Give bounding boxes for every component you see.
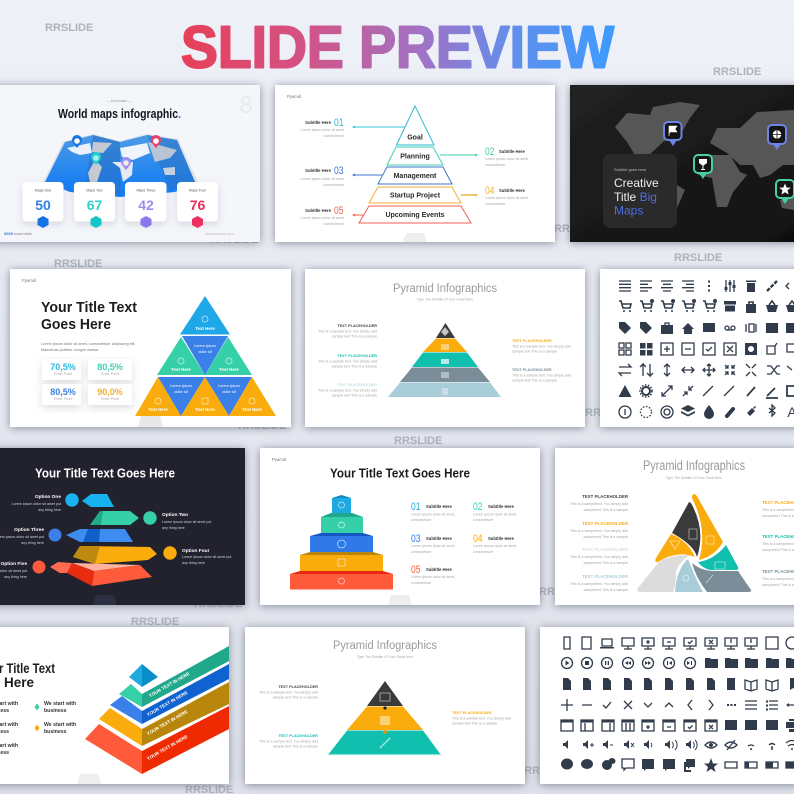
panel: pyramid infographics slide one bbox=[305, 269, 585, 427]
left labels: TEXT PLACEHOLDER bbox=[337, 383, 377, 387]
left labels: samplerext This is a sample bbox=[584, 508, 628, 512]
pyramid bbox=[388, 323, 501, 397]
heading: Your Title Text Goes Here bbox=[330, 466, 470, 480]
card: maps three: Maps Three bbox=[136, 188, 156, 192]
triangle pyramid: Text Here bbox=[195, 326, 215, 331]
left labels: This is a sampletext. You simply add bbox=[570, 502, 628, 506]
info panel bbox=[603, 154, 677, 228]
pyramid bbox=[328, 681, 441, 755]
stat cards: 70,5% bbox=[50, 362, 76, 372]
world map silhouette bbox=[615, 102, 794, 210]
right labels: This is a sample text. You simply add bbox=[512, 374, 571, 378]
icons row: devices bbox=[564, 637, 794, 649]
bullets: business bbox=[44, 729, 67, 735]
right labels bbox=[762, 500, 794, 587]
slide number: 8 bbox=[239, 92, 253, 119]
numbered items: 03 bbox=[411, 533, 420, 545]
panel: pyramid infographics slide two: Pyramid Infographics bbox=[333, 640, 437, 652]
icons row: text alignment and tools bbox=[619, 280, 789, 292]
triangle pyramid: Text Here bbox=[148, 407, 168, 412]
stat cards: Enter Point bbox=[54, 372, 72, 376]
option labels: Option Two bbox=[162, 512, 188, 518]
numbered items: Lorem ipsum dolor sit amet, bbox=[473, 544, 517, 548]
watermarks: RRSLIDE bbox=[210, 234, 258, 246]
left labels: sample text This is a sample bbox=[273, 696, 318, 700]
left callouts bbox=[301, 117, 405, 226]
bullets: We start with bbox=[44, 722, 76, 728]
left callouts: consectetuer bbox=[323, 134, 345, 138]
watermarks: RRSLIDE bbox=[713, 66, 761, 78]
spiral pyramid bbox=[637, 494, 751, 592]
panel: stacked pyramid slide: Pyamid bbox=[272, 457, 287, 462]
option labels: Option Three bbox=[14, 527, 44, 533]
folded world map bbox=[42, 134, 199, 197]
icon grid bbox=[561, 637, 794, 772]
tier labels: Management bbox=[394, 173, 437, 180]
left callouts: 05 bbox=[334, 205, 344, 217]
stat cards: 90,0% bbox=[97, 387, 123, 397]
panel: outlined pyramid slide: Pyamid bbox=[287, 94, 302, 99]
triangle pyramid: dolor sit bbox=[222, 390, 237, 394]
watermarks: RRSLIDE bbox=[45, 22, 93, 34]
numbered items: 04 bbox=[473, 533, 482, 545]
triangle pyramid bbox=[135, 296, 276, 416]
stat cards: 80,5% bbox=[50, 387, 76, 397]
stat cards bbox=[42, 359, 132, 405]
right callouts: Lorem ipsum dolor sit amet bbox=[485, 196, 528, 200]
option labels: any thing here bbox=[162, 526, 185, 530]
watermarks: RRSLIDE bbox=[54, 258, 102, 270]
left labels: sample text This is a sample bbox=[332, 364, 377, 368]
option labels: Lorem ipsum dolor sit amet put bbox=[182, 555, 231, 559]
icons row: warning and resize bbox=[618, 385, 794, 398]
right callouts: 04 bbox=[485, 185, 494, 197]
isometric pyramid: YOUR TEXT IN HERE bbox=[146, 709, 189, 736]
map pins bbox=[72, 135, 82, 148]
left labels: This is a sample text. You simply add bbox=[318, 330, 377, 334]
card: maps one: 50 bbox=[35, 197, 51, 213]
card: maps four bbox=[177, 182, 218, 228]
option labels: any thing here bbox=[4, 575, 27, 579]
panel: icon set two bbox=[540, 627, 794, 784]
bullets: art with bbox=[0, 722, 18, 728]
left labels bbox=[259, 685, 318, 748]
triangle pyramid: Lorem ipsum bbox=[170, 384, 192, 388]
watermarks: RRSLIDE bbox=[238, 420, 286, 432]
panel: spiral pyramid slide bbox=[555, 448, 794, 605]
triangle pyramid: dolor sit bbox=[174, 390, 189, 394]
card: maps one: Maps One bbox=[35, 188, 51, 192]
left labels: samplerext This is a sample bbox=[584, 588, 628, 592]
left labels: This is a sample text. You simply add bbox=[318, 388, 377, 392]
numbered items: Lorem ipsum dolor sit amet, bbox=[473, 512, 517, 516]
tier labels: Upcoming Events bbox=[385, 212, 445, 219]
panel: isometric ribbon pyramid slide bbox=[0, 627, 229, 784]
numbered items: Subtitle Here bbox=[488, 536, 514, 541]
left callouts: consectetuer bbox=[323, 183, 345, 187]
left callouts: Subtitle Here bbox=[305, 168, 332, 173]
numbered items: Subtitle Here bbox=[426, 567, 452, 572]
footer: 2023 essentials bbox=[4, 231, 32, 236]
icons row: misc symbols bbox=[619, 404, 794, 420]
panel: icon set one bbox=[600, 269, 794, 427]
numbered items: Lorem ipsum dolor sit amet, bbox=[411, 575, 455, 579]
panel: spiral pyramid slide: Type The Subtitle Of Your Great Here bbox=[666, 476, 722, 480]
slide heading: World maps infographic. bbox=[58, 106, 181, 121]
left labels: This is a sample text. You simply add bbox=[259, 740, 318, 744]
right label: This is a sample text. You simply add bbox=[452, 716, 511, 720]
body text bbox=[41, 342, 136, 352]
bullets bbox=[0, 701, 76, 756]
watermarks: RRSLIDE bbox=[674, 252, 722, 264]
card: maps two: 67 bbox=[87, 197, 102, 213]
icons row: carts and shop bbox=[619, 299, 794, 313]
left callouts: Lorem ipsum dolor sit amet bbox=[301, 177, 344, 181]
right callouts bbox=[440, 146, 528, 206]
option circles bbox=[32, 493, 177, 574]
bullets: art with bbox=[0, 701, 18, 707]
numbered items: 02 bbox=[473, 501, 482, 513]
right labels bbox=[512, 339, 571, 382]
right callouts: 02 bbox=[485, 146, 494, 158]
right labels: This is a sample text. You simply add bbox=[512, 344, 571, 348]
watermarks: RRSLIDE bbox=[554, 223, 602, 235]
icons row: windows and mail bbox=[561, 719, 794, 732]
left labels: TEXT PLACEHOLDER bbox=[337, 324, 377, 328]
numbered items: consectetuer bbox=[411, 518, 432, 522]
left labels: This is a sampletext. You simply add bbox=[570, 529, 628, 533]
card: maps four: Maps Four bbox=[189, 188, 207, 192]
option labels: Option Five bbox=[1, 561, 27, 567]
left labels bbox=[318, 324, 377, 398]
left callouts: 03 bbox=[334, 165, 344, 177]
triangle pyramid: dolor sit bbox=[198, 350, 213, 354]
card: maps two: Maps Two bbox=[86, 188, 103, 192]
left labels: samplerext This is a sample bbox=[584, 535, 628, 539]
left labels: TEXT PLACEHOLDER bbox=[582, 521, 629, 526]
left callouts: Lorem ipsum dolor sit amet bbox=[301, 128, 344, 132]
icons row: chat, star, batteries bbox=[561, 758, 794, 772]
right labels: TEXT PLACEHOLDER bbox=[512, 368, 552, 372]
watermarks: RRSLIDE bbox=[539, 586, 587, 598]
watermarks: RRSLIDE bbox=[585, 407, 633, 419]
option labels: any thing here bbox=[38, 508, 61, 512]
icon grid bbox=[618, 280, 794, 420]
stat cards: 80,5% bbox=[97, 362, 123, 372]
left callouts: Subtitle Here bbox=[305, 120, 332, 125]
card: maps three: 42 bbox=[138, 197, 154, 213]
left labels: TEXT PLACEHOLDER bbox=[337, 354, 377, 358]
bullets: ess bbox=[0, 729, 9, 735]
panel: dark layered pyramid slide bbox=[0, 448, 245, 605]
page tab bbox=[388, 595, 412, 605]
stacked pyramid tiers bbox=[290, 495, 393, 590]
bullets: business bbox=[44, 708, 67, 714]
right callouts: consectetuer bbox=[485, 163, 506, 167]
numbered items: consectetuer bbox=[473, 518, 494, 522]
isometric pyramid: YOUR TEXT IN HERE bbox=[148, 671, 191, 698]
right label: sample text This is a sample bbox=[452, 722, 497, 726]
panel: triangle pyramid slide bbox=[10, 269, 291, 427]
right labels: TEXT PLACEHOLDER bbox=[512, 339, 552, 343]
triangle pyramid: Text Here bbox=[195, 407, 215, 412]
bullets: art with bbox=[0, 743, 18, 749]
left labels: TEXT PLACEHOLDER bbox=[278, 734, 318, 738]
panel: world maps infographic slide bbox=[0, 85, 260, 242]
isometric pyramid bbox=[85, 646, 229, 774]
watermarks: RRSLIDE bbox=[194, 598, 242, 610]
tier labels: Planning bbox=[400, 154, 430, 160]
isometric pyramid: YOUR TEXT IN HERE bbox=[146, 734, 189, 761]
option labels: Lorem ipsum dolor sit amet put bbox=[12, 502, 61, 506]
panel: stacked pyramid slide bbox=[260, 448, 540, 605]
left labels: sample text This is a sample bbox=[332, 394, 377, 398]
panel: pyramid infographics slide two: Type The Subtitle Of Your Great Here bbox=[357, 655, 413, 659]
stat cards: Enter Point bbox=[101, 372, 119, 376]
page tab bbox=[138, 416, 163, 427]
heading bbox=[0, 661, 55, 690]
panel: creative title big maps slide bbox=[570, 85, 794, 242]
left callouts: consectetuer bbox=[323, 222, 345, 226]
heading: r Title Text bbox=[0, 661, 55, 676]
pin: globe bbox=[768, 125, 786, 150]
heading: Your Title Text Goes Here bbox=[35, 466, 175, 480]
pyramid layers bbox=[50, 494, 157, 586]
option labels: any thing here bbox=[21, 541, 44, 545]
left labels: This is a sample text. You simply add bbox=[318, 360, 377, 364]
icons row: arrows bbox=[619, 364, 792, 376]
icons row: documents bbox=[563, 678, 794, 691]
right label bbox=[452, 711, 511, 726]
pin: trophy bbox=[694, 155, 712, 179]
numbered items: Subtitle Here bbox=[426, 504, 452, 509]
right callouts: consectetuer bbox=[485, 202, 506, 206]
body text: Lorem ipsum dolor sit amet, consectetuer adipiscing elit. bbox=[41, 342, 136, 346]
left labels: This is a sampletext. You simply add bbox=[570, 582, 628, 586]
panel: spiral pyramid slide: Pyramid Infographics bbox=[643, 458, 745, 473]
left labels bbox=[570, 494, 629, 592]
right label: TEXT PLACEHOLDER bbox=[452, 711, 492, 715]
body text: Maecenas porttitor congue massa bbox=[41, 348, 99, 352]
tier labels bbox=[385, 134, 445, 219]
card: maps three bbox=[125, 182, 166, 228]
info panel: Title Big bbox=[614, 190, 657, 204]
triangle pyramid: Lorem ipsum bbox=[194, 344, 216, 348]
left labels: TEXT PLACEHOLDER bbox=[582, 547, 629, 552]
numbered items: Subtitle Here bbox=[426, 536, 452, 541]
slide kicker: — e2zentials — bbox=[106, 99, 132, 103]
triangle pyramid: Text Here bbox=[219, 367, 239, 372]
tier labels: Startup Project bbox=[390, 192, 441, 200]
watermarks: RRSLIDE bbox=[131, 616, 179, 628]
stat cards: Enter Point bbox=[54, 397, 72, 401]
numbered items: Lorem ipsum dolor sit amet, bbox=[411, 544, 455, 548]
option labels: Lorem ipsum dolor sit amet put bbox=[162, 520, 211, 524]
info panel: Subtitle goes here bbox=[614, 167, 647, 172]
numbered items: consectetuer bbox=[411, 550, 432, 554]
bullets: We start with bbox=[44, 701, 76, 707]
right labels: sample text This is a sample bbox=[512, 378, 557, 382]
right callouts: Lorem ipsum dolor sit amet bbox=[485, 157, 528, 161]
left labels: This is a sample text. You simply add bbox=[259, 690, 318, 694]
right callouts: Subtitle Here bbox=[499, 188, 525, 193]
panel: pyramid infographics slide one: Pyramid Infographics bbox=[393, 283, 497, 295]
left callouts: Lorem ipsum dolor sit amet bbox=[301, 216, 344, 220]
right callouts: Subtitle Here bbox=[499, 149, 525, 154]
numbered items: 05 bbox=[411, 564, 420, 576]
numbered items: Subtitle Here bbox=[488, 504, 514, 509]
panel: triangle pyramid slide: Pyamid bbox=[22, 278, 37, 283]
left labels: samplerext This is a sample bbox=[584, 561, 628, 565]
card: maps four: 76 bbox=[190, 197, 205, 213]
triangle pyramid: Text Here bbox=[171, 367, 191, 372]
icons row: signs bbox=[561, 699, 794, 711]
icons row: sound and wifi bbox=[563, 740, 794, 750]
page tab bbox=[93, 595, 117, 605]
left callouts: 01 bbox=[334, 117, 344, 129]
option labels bbox=[0, 494, 231, 579]
heading: Your Title Text bbox=[41, 299, 137, 316]
isometric pyramid: YOUR TEXT IN HERE bbox=[146, 690, 189, 717]
left callouts: Subtitle Here bbox=[305, 208, 332, 213]
numbered items: Lorem ipsum dolor sit amet, bbox=[411, 512, 455, 516]
left labels: TEXT PLACEHOLDER bbox=[582, 494, 629, 499]
card: maps two bbox=[74, 182, 115, 228]
heading: Goes Here bbox=[41, 316, 111, 333]
option labels: Option One bbox=[35, 494, 61, 500]
bullets: ess bbox=[0, 708, 9, 714]
right labels: sample text This is a sample bbox=[512, 350, 557, 354]
panel: outlined pyramid slide bbox=[275, 85, 555, 242]
panel: pyramid infographics slide one: Type The Subtitle Of Your Great Here bbox=[417, 298, 473, 302]
numbered items bbox=[411, 501, 517, 585]
info panel: Creative bbox=[614, 176, 659, 190]
page tab bbox=[77, 774, 101, 784]
icons row: tags and containers bbox=[619, 322, 794, 334]
watermarks: RRSLIDE bbox=[394, 435, 442, 447]
pyramid tiers bbox=[359, 106, 471, 223]
left labels: TEXT PLACEHOLDER bbox=[278, 685, 318, 689]
numbered items: 01 bbox=[411, 501, 420, 513]
pin: star bbox=[776, 180, 794, 204]
panel: world maps infographic slide: www.website.com bbox=[205, 232, 234, 236]
option labels: Option Four bbox=[182, 548, 210, 554]
tier labels: Goal bbox=[407, 134, 423, 142]
bullets: ess bbox=[0, 750, 9, 756]
left labels: sample text This is a sample bbox=[273, 744, 318, 748]
panel: pyramid infographics slide two bbox=[245, 627, 525, 784]
heading bbox=[41, 299, 137, 333]
icons row: squares bbox=[619, 343, 794, 356]
watermarks: RRSLIDE bbox=[524, 765, 572, 777]
numbered items: consectetuer bbox=[411, 581, 432, 585]
option labels: any thing here bbox=[182, 561, 205, 565]
numbered items: consectetuer bbox=[473, 550, 494, 554]
stat cards: Enter Point bbox=[101, 397, 119, 401]
left labels: TEXT PLACEHOLDER bbox=[582, 574, 629, 579]
icons row: media and folders bbox=[562, 658, 794, 668]
triangle pyramid: Text Here bbox=[242, 407, 262, 412]
left labels: sample text This is a sample bbox=[332, 334, 377, 338]
info panel: Maps bbox=[614, 204, 643, 218]
pin: flag bbox=[664, 122, 682, 146]
title: SLIDE PREVIEW bbox=[181, 14, 614, 80]
page tab bbox=[403, 233, 427, 242]
triangle pyramid: Lorem ipsum bbox=[218, 384, 240, 388]
card: maps one bbox=[22, 182, 64, 228]
left labels: This is a sampletext. You simply add bbox=[570, 555, 628, 559]
